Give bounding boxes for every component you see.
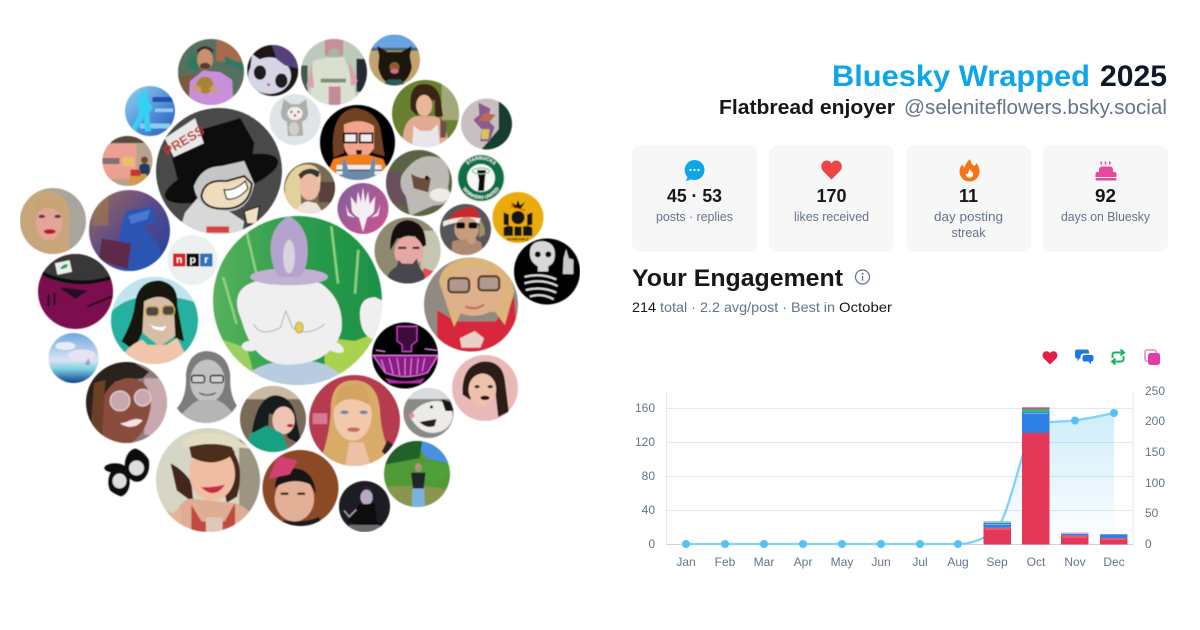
avatar: woman in green field [384, 441, 450, 507]
left axis labels: 160 [635, 401, 655, 415]
display name and handle: @seleniteflowers.bsky.social [904, 97, 1167, 119]
avatar: blonde with red lips [20, 188, 86, 254]
avatar: smiling woman with round glasses [86, 362, 167, 443]
month labels: Feb [715, 555, 736, 569]
avatar: npr logo: n [176, 254, 182, 266]
label: days on Bluesky [1061, 210, 1151, 224]
right axis labels: 100 [1145, 476, 1165, 490]
line markers [682, 409, 1118, 548]
avatar: tattoo [461, 98, 512, 150]
panel: day posting streak [906, 145, 1031, 252]
left axis labels [635, 401, 655, 551]
avatar: clouds and sea [48, 333, 98, 383]
month labels: Apr [794, 555, 812, 569]
avatar: woman with cat [374, 218, 440, 284]
icon: quotes pages [1145, 350, 1160, 365]
avatar: possum [404, 388, 454, 438]
engagement summary: 214 [632, 299, 656, 315]
avatar: woman with teal hair [240, 386, 306, 452]
avatar: fedora press character: PRESS [161, 123, 207, 159]
avatar: blonde woman selfie [284, 162, 335, 214]
avatar: yellow crown logo: HOWERIBLE [507, 237, 530, 241]
panel: days on Bluesky [1043, 145, 1168, 252]
right axis labels [1145, 384, 1165, 551]
right axis labels: 50 [1145, 506, 1159, 520]
avatar: skeleton thumbs up [514, 238, 580, 304]
avatar: onion hat character [38, 254, 113, 329]
avatar: woman in white top [392, 80, 459, 147]
label: likes received [794, 210, 869, 224]
avatar cluster [20, 34, 580, 532]
avatar: presenter at podium [102, 136, 152, 186]
right axis labels: 250 [1145, 384, 1165, 398]
avatar: blue dragon reading [89, 190, 170, 271]
avatar: cartoon man with glasses and overalls [320, 105, 395, 180]
avatar: litwick candle character [213, 216, 382, 385]
month labels: Jun [871, 555, 891, 569]
left axis labels: 80 [642, 469, 655, 483]
avatar: woman on pink background [452, 355, 518, 421]
avatar: man in santa hat [440, 204, 491, 255]
right axis labels: 200 [1145, 414, 1165, 428]
chart legend [1042, 350, 1160, 365]
avatar: magenta fist artwork [372, 322, 438, 388]
icon: likes heart [1042, 351, 1058, 364]
avatar: cat face [247, 45, 298, 96]
label: day posting [934, 210, 1003, 224]
icon: replies bubbles [1075, 350, 1094, 364]
avatar: blue figure [125, 86, 175, 136]
engagement summary: total · 2.2 avg/post · Best in [660, 299, 835, 315]
avatar: woman with cream hat [156, 428, 260, 532]
month labels: Sep [986, 555, 1008, 569]
display name and handle: Flatbread enjoyer [719, 97, 895, 119]
avatar: grey plush toy [270, 94, 320, 145]
avatar: blonde woman on red background [309, 375, 400, 466]
avatar: fedora press character [156, 108, 283, 234]
avatar: npr logo [168, 235, 218, 285]
icon: chat bubble [685, 160, 705, 181]
month labels: Mar [754, 555, 774, 569]
avatar: starbucks workers united logo: STARBUCKS [465, 156, 497, 166]
avatar: two head logo [102, 447, 152, 497]
avatar: magic planeswalker logo [338, 183, 388, 234]
avatar: starbucks workers united logo: WORKERS UNITED [462, 186, 500, 200]
icon: flame [960, 159, 980, 182]
avatar: yellow crown logo [492, 192, 544, 243]
display name and handle [719, 97, 1167, 119]
value: 45 · 53 [667, 185, 722, 206]
avatar: npr logo: p [190, 254, 196, 266]
avatar: woman on dark background [339, 481, 390, 532]
month labels: Dec [1103, 555, 1125, 569]
icon: cake [1096, 162, 1116, 180]
engagement summary: October [839, 299, 892, 315]
avatar: cartoon man with sunglasses [111, 277, 198, 364]
month labels: Jan [676, 555, 696, 569]
avatar: man with pink ears [262, 450, 338, 526]
left axis labels: 0 [648, 537, 655, 551]
label [934, 210, 1003, 240]
engagement summary [632, 299, 892, 315]
avatar: dog on beach [369, 34, 420, 86]
avatar: greyscale drawn woman with glasses [176, 350, 238, 424]
value: 11 [959, 185, 978, 206]
cumulative line [686, 413, 1114, 544]
label: posts · replies [656, 210, 733, 224]
avatar: woman in red shirt with glasses [424, 258, 518, 352]
bars: dec [1100, 534, 1128, 544]
panel: posts and replies [632, 145, 757, 252]
icon: info [856, 270, 870, 284]
bars: sep [984, 521, 1011, 544]
chart: engagement by month [635, 384, 1165, 569]
cumulative area [686, 413, 1114, 544]
value: 92 [1095, 185, 1116, 206]
right axis labels: 0 [1145, 537, 1152, 551]
avatar: man with coconut [178, 39, 244, 105]
avatar: star wars costume [301, 39, 367, 105]
month labels: Oct [1027, 555, 1046, 569]
month labels: Jul [912, 555, 928, 569]
month labels: May [831, 555, 853, 569]
avatar: fluffy cow [386, 150, 452, 216]
avatar: npr logo: r [204, 254, 208, 266]
icon: heart [821, 160, 842, 180]
bars: nov [1061, 532, 1088, 544]
title: Bluesky Wrapped [832, 60, 1090, 93]
month labels: Aug [947, 555, 969, 569]
right axis labels: 150 [1145, 445, 1165, 459]
label: streak [952, 226, 986, 240]
avatar: starbucks workers united logo [456, 153, 506, 203]
left axis labels: 120 [635, 435, 655, 449]
month labels [676, 555, 1125, 569]
grid lines [666, 391, 1133, 544]
panel: likes received [769, 145, 894, 252]
heading: your engagement: Your Engagement [632, 265, 843, 292]
value: 170 [816, 185, 846, 206]
month labels: Nov [1064, 555, 1086, 569]
bars: oct [1022, 407, 1050, 544]
left axis labels: 40 [642, 503, 655, 517]
icon: reposts arrows [1112, 350, 1124, 364]
title: 2025 [1100, 60, 1167, 93]
